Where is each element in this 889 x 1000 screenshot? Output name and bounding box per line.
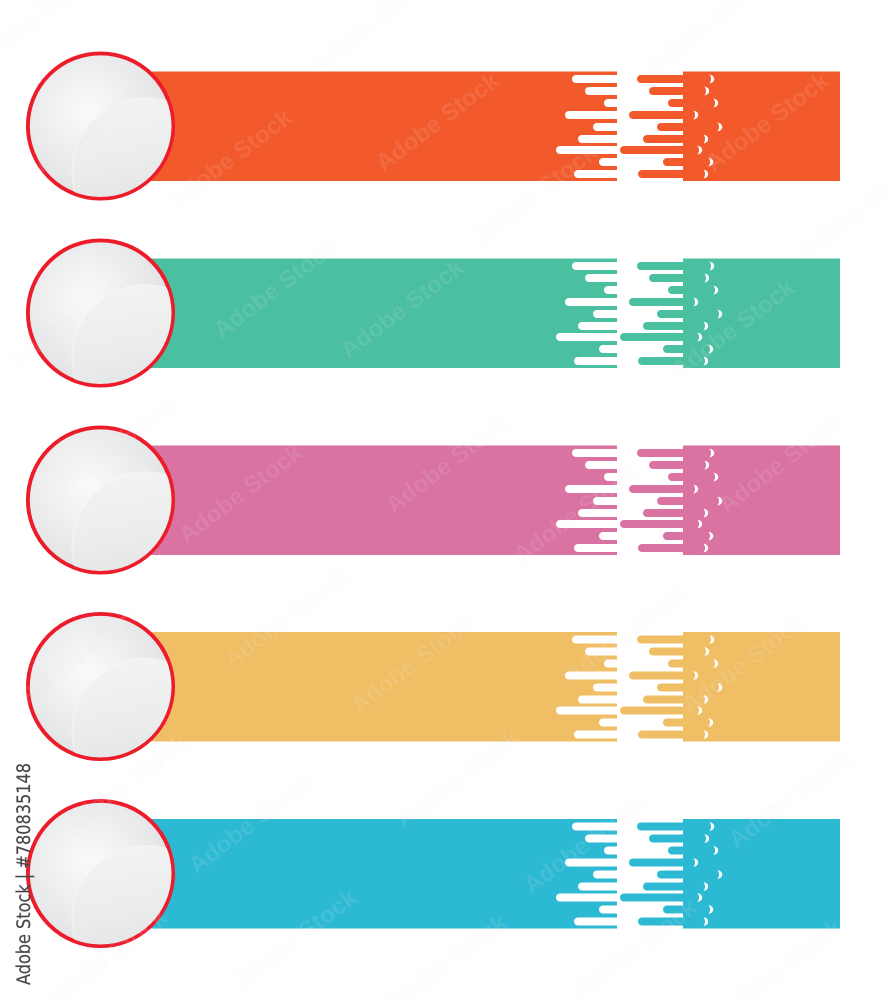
blank circle badge — [28, 614, 220, 806]
stock watermarks: Adobe Stock — [667, 274, 801, 384]
green bar — [150, 258, 617, 368]
blue bar — [150, 819, 617, 928]
green block with tabs — [620, 258, 840, 368]
crescent marks — [693, 822, 722, 926]
white drip stripes — [556, 262, 621, 365]
stock watermarks: Adobe Stock — [724, 744, 858, 854]
pink block with tabs — [620, 446, 840, 555]
banner 1: orange — [28, 53, 840, 246]
banner 4: yellow — [28, 614, 840, 806]
blue block with tabs — [620, 819, 840, 928]
yellow bar — [150, 632, 617, 742]
stock watermarks: Adobe Stock — [519, 789, 653, 899]
stock id caption: Adobe Stock | #780835148 — [14, 763, 35, 985]
banner 3: pink — [28, 427, 840, 620]
orange bar — [150, 72, 617, 181]
yellow block with tabs — [620, 632, 840, 742]
banner 2: green — [28, 240, 840, 433]
stock watermarks: Adobe Stock — [381, 409, 515, 519]
crescent marks — [693, 449, 722, 552]
stock watermarks: Adobe Stock — [49, 389, 183, 499]
stock watermarks: Adobe Stock — [391, 724, 525, 834]
blank circle badge — [28, 240, 220, 433]
stock watermarks: Adobe Stock — [4, 264, 138, 374]
banner 5: blue — [28, 801, 840, 994]
stock watermarks: Adobe Stock — [714, 409, 848, 519]
stock watermarks: Adobe Stock — [184, 769, 318, 879]
stock watermarks: Adobe Stock — [29, 69, 163, 179]
blank circle badge — [28, 53, 220, 246]
stock watermarks: Adobe Stock — [229, 884, 363, 994]
stock watermarks: Adobe Stock — [701, 67, 835, 177]
white drip stripes — [556, 75, 621, 178]
stock watermarks: Adobe Stock — [59, 729, 193, 839]
stock watermarks: Adobe Stock — [14, 599, 148, 709]
white drip stripes — [556, 636, 621, 738]
orange block with tabs — [620, 72, 840, 181]
stock watermarks: Adobe Stock — [219, 564, 353, 674]
crescent marks — [693, 75, 722, 178]
blank circle badge — [28, 801, 220, 994]
stock watermarks: Adobe Stock — [174, 439, 308, 549]
stock watermarks: Adobe Stock — [509, 459, 643, 569]
blank circle badge — [28, 427, 220, 620]
stock watermarks: Adobe Stock — [371, 67, 505, 177]
stock watermarks: Adobe Stock — [336, 254, 470, 364]
stock watermarks: Adobe Stock — [164, 104, 298, 214]
stock watermarks: Adobe Stock — [469, 139, 603, 249]
stock watermarks: Adobe Stock — [677, 609, 811, 719]
stock watermarks: Adobe Stock — [209, 234, 343, 344]
crescent marks — [693, 262, 722, 365]
crescent marks — [693, 635, 722, 739]
stock watermarks: Adobe Stock — [559, 579, 693, 689]
stock watermarks: Adobe Stock — [346, 609, 480, 719]
white drip stripes — [556, 449, 621, 552]
white drip stripes — [556, 822, 621, 926]
pink bar — [150, 446, 617, 555]
